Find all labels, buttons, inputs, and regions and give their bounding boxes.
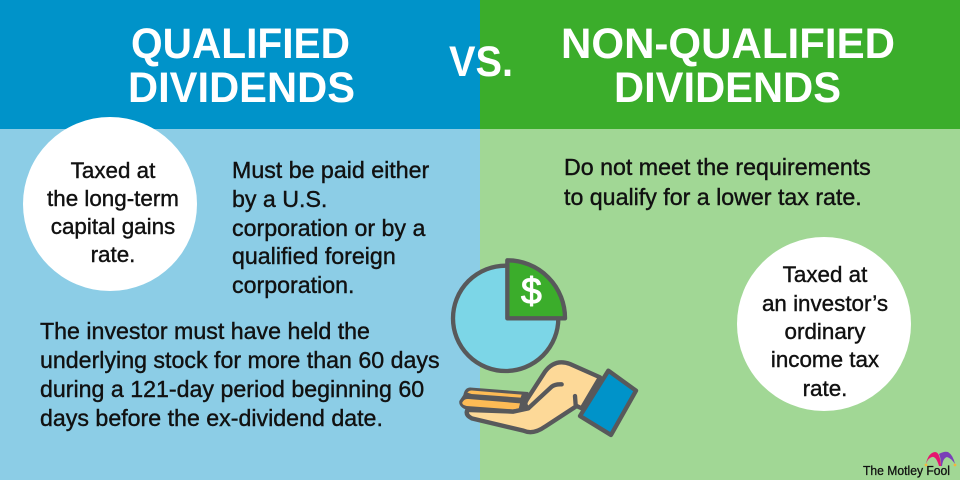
cuff [580, 371, 636, 435]
panel: qualified background [0, 129, 480, 480]
heading: qualified dividends: QUALIFIED [131, 20, 350, 68]
callout: long-term rate circle: rate. [91, 242, 135, 267]
callout: ordinary income rate circle: Taxed at [783, 262, 868, 287]
callout: ordinary income rate circle: rate. [803, 376, 847, 401]
callout: long-term rate circle: capital gains [51, 214, 175, 239]
text block: requirements: to qualify for a lower tax rate. [564, 184, 862, 210]
panel: non-qualified background [480, 129, 960, 480]
heading: vs: VS. [449, 38, 513, 86]
heading: non-qualified dividends [561, 20, 895, 112]
callout: long-term rate circle: Taxed at [71, 158, 156, 183]
icon: jester hat [925, 452, 956, 466]
thumb crease [528, 384, 562, 408]
palm [467, 362, 600, 432]
heading: qualified dividends: DIVIDENDS [128, 64, 355, 112]
text block: requirements: Do not meet the requirements [564, 154, 871, 180]
logo: The Motley Fool: The Motley Fool [863, 463, 950, 478]
text block: paid by corporation: Must be paid either [232, 157, 429, 183]
text block: holding period: The investor must have held the [40, 318, 370, 344]
icon: hand holding pie chart with dollar [453, 260, 636, 435]
heading: qualified dividends [128, 20, 355, 112]
header band: qualified [0, 0, 480, 129]
text block: paid by corporation: corporation or by a [232, 215, 425, 241]
callout: ordinary income rate circle: income tax [771, 347, 879, 372]
heading: non-qualified dividends: DIVIDENDS [614, 64, 841, 112]
header band: non-qualified [480, 0, 960, 129]
callout: ordinary income rate circle: an investor’s [762, 291, 888, 316]
text block: holding period: days before the ex-dividend date. [40, 405, 383, 431]
text block: holding period [40, 318, 440, 431]
callout: long-term rate circle [23, 117, 197, 291]
heading: non-qualified dividends: NON-QUALIFIED [561, 20, 895, 68]
callout: long-term rate circle: the long-term [47, 186, 179, 211]
callout: ordinary income rate circle [737, 237, 911, 411]
text block: paid by corporation: qualified foreign [232, 243, 396, 269]
pie slice [507, 260, 565, 318]
text block: requirements [564, 154, 871, 210]
fingers [459, 388, 530, 413]
text block: paid by corporation: corporation. [232, 272, 354, 298]
callout: ordinary income rate circle: ordinary [785, 319, 866, 344]
logo: The Motley Fool [863, 452, 956, 478]
pie circle [453, 266, 558, 371]
wrist crease [568, 396, 582, 405]
text block: holding period: during a 121-day period beginning 60 [40, 376, 424, 402]
text block: paid by corporation: by a U.S. [232, 186, 327, 212]
text block: holding period: underlying stock for more than 60 days [40, 347, 440, 373]
dollar sign: $ [521, 269, 542, 311]
text block: paid by corporation [232, 157, 429, 298]
